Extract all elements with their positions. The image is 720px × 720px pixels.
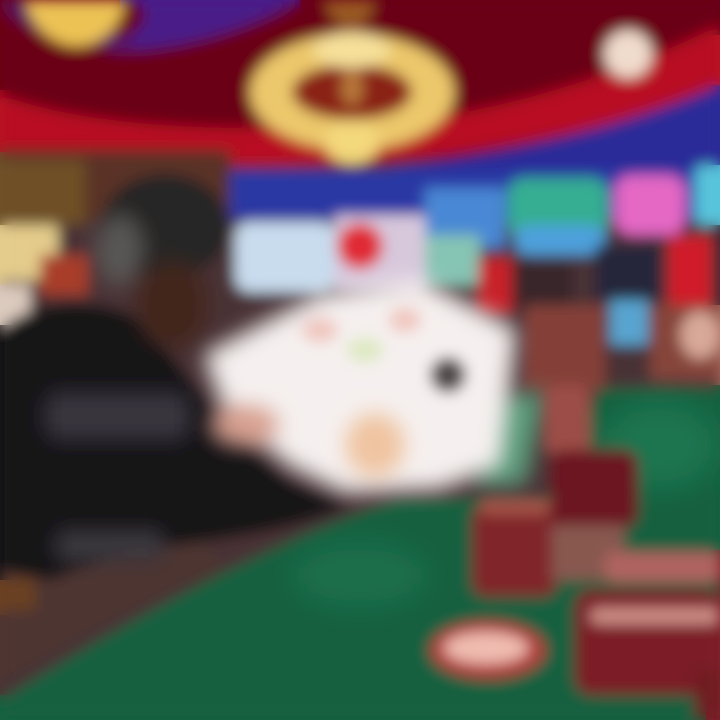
player: head and hair: [96, 174, 229, 349]
table: green felt: [0, 388, 720, 720]
chandelier: gold top left: [26, 0, 124, 46]
playing cards: white fanned spread: [205, 280, 515, 492]
chandelier: large gold centre: [250, 0, 454, 164]
poker chips: red stacks: [430, 385, 720, 720]
left background: gold and cream lights: [0, 160, 88, 330]
bottom left: wooden table rail: [0, 540, 225, 680]
ceiling: dark red canopy with purple and blue bands: [0, 0, 720, 220]
card symbol: dark suit mark: [430, 357, 466, 393]
ceiling light: white spot: [604, 30, 652, 78]
player: dark suit: [0, 304, 350, 580]
background: casino screens: [235, 165, 720, 390]
